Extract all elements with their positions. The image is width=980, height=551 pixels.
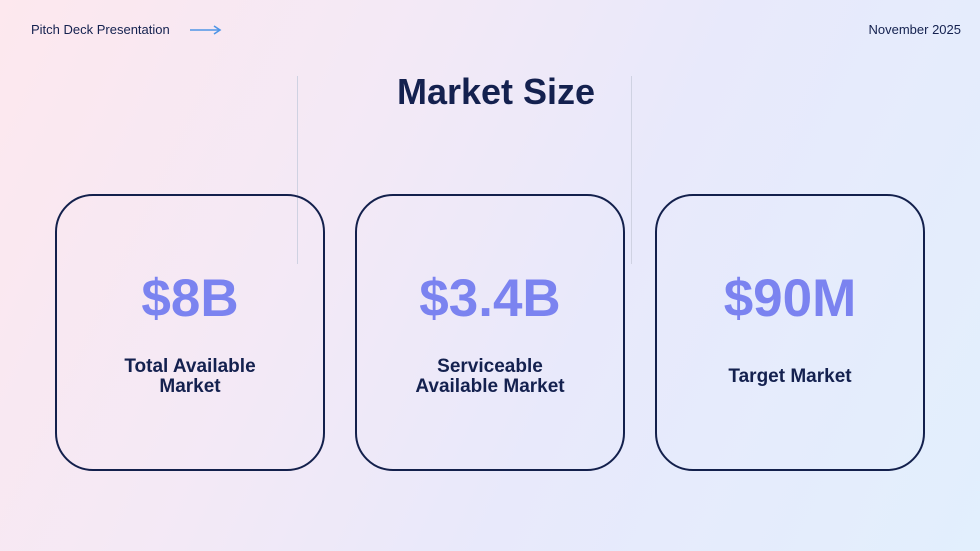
header left text: Pitch Deck Presentation [31,22,170,37]
card: serviceable available market [355,194,625,471]
card: target market [655,194,925,471]
title: Market Size [397,71,595,112]
card: serviceable available market: Serviceable [437,356,543,377]
icon: arrow [190,25,222,35]
card: target market: $90M [724,269,856,328]
header date: November 2025 [868,22,961,37]
card: serviceable available market: Available Market [415,376,565,397]
card: total available market: Market [159,376,221,397]
card: total available market [55,194,325,471]
card: serviceable available market: $3.4B [419,269,561,328]
card: total available market: $8B [141,269,239,328]
card: total available market: Total Available [124,356,256,377]
card: target market: Target Market [728,366,852,387]
